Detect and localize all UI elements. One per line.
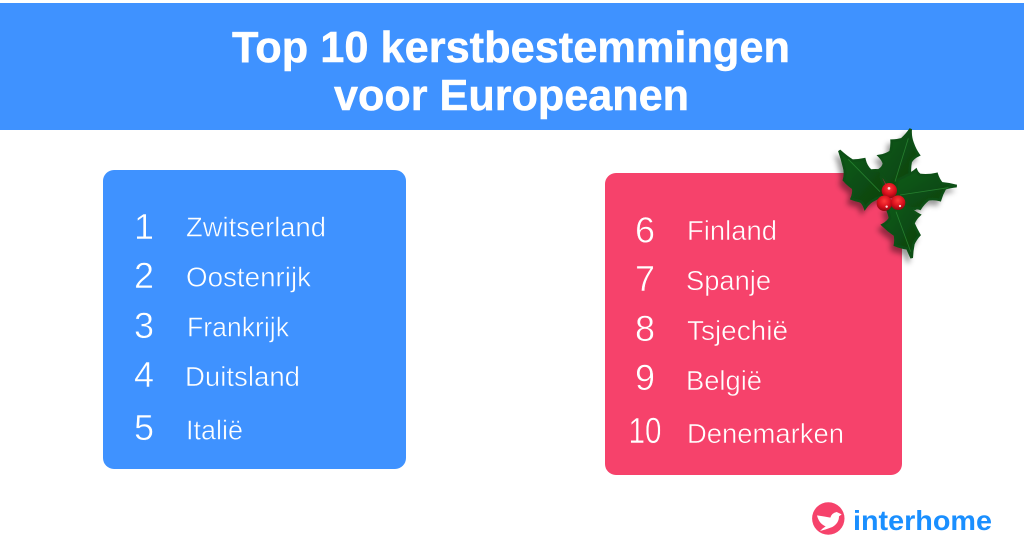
title: Top 10 kerstbestemmingen [232,23,790,72]
rank 9 België: België [686,365,762,396]
rank 2 Oostenrijk: Oostenrijk [186,262,312,292]
title banner [0,3,1024,130]
rank 9 België: 9 [635,357,655,398]
rank 7 Spanje: Spanje [686,265,771,296]
rank 7 Spanje [635,258,771,299]
rank 2 Oostenrijk: 2 [134,255,154,296]
rank 2 Oostenrijk [134,255,312,296]
panel: ranks 6 to 10 [605,173,902,475]
rank 5 Italië [134,407,243,448]
rank 3 Frankrijk: 3 [134,305,154,346]
rank 8 Tsjechië: Tsjechië [687,315,788,346]
rank 1 Zwitserland [134,206,326,247]
rank 1 Zwitserland: 1 [134,206,154,247]
rank 6 Finland [635,210,777,250]
rank 4 Duitsland: Duitsland [185,361,300,392]
logo: interhome [812,502,992,536]
rank 10 Denemarken: 10 [628,410,662,451]
wordmark: interhome [853,505,992,536]
rank 3 Frankrijk [134,305,290,346]
rank 8 Tsjechië [635,308,788,349]
rank 9 België [635,357,762,398]
title: voor Europeanen [334,71,689,120]
rank 3 Frankrijk: Frankrijk [187,312,290,342]
icon: bird in circle [812,502,844,535]
rank 6 Finland: 6 [635,210,655,250]
rank 10 Denemarken: Denemarken [687,418,844,449]
title [232,23,790,120]
rank 5 Italië: Italië [186,414,243,446]
rank 5 Italië: 5 [134,407,154,448]
rank 10 Denemarken [628,410,844,451]
rank 1 Zwitserland: Zwitserland [186,212,326,242]
rank 4 Duitsland [134,354,300,395]
icon: holly sprig [839,129,957,258]
rank 6 Finland: Finland [687,215,777,246]
rank 8 Tsjechië: 8 [635,308,655,349]
rank 7 Spanje: 7 [635,258,655,299]
panel: ranks 1 to 5 [103,170,406,469]
rank 4 Duitsland: 4 [134,354,154,395]
